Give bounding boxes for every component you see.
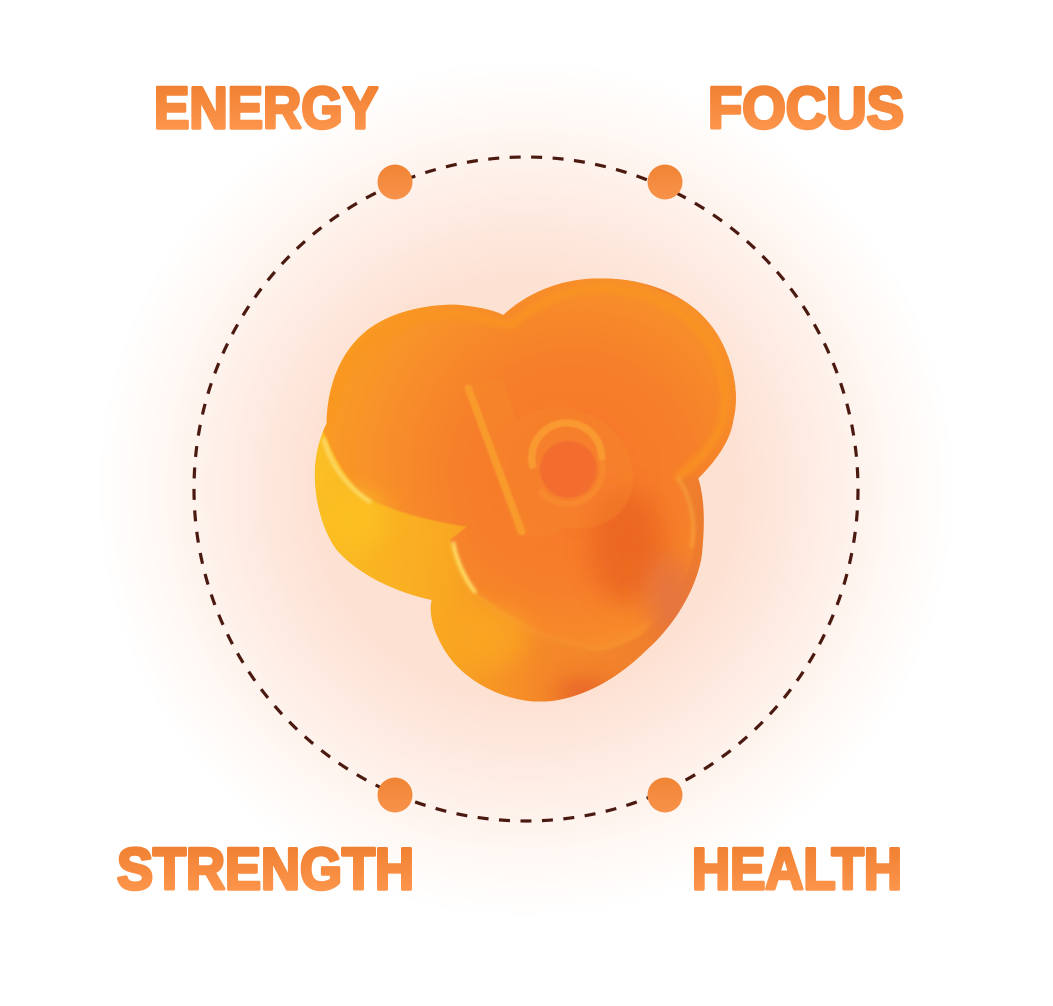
- label: health: HEALTH: [692, 837, 902, 902]
- node: strength: [378, 778, 412, 812]
- highlight edges: [324, 288, 725, 649]
- background glow: [96, 59, 956, 919]
- node: health: [648, 778, 682, 812]
- node: focus: [648, 164, 682, 200]
- node: energy: [378, 164, 412, 200]
- logo letter b: [463, 380, 633, 537]
- dashed orbit ring: [194, 157, 858, 821]
- gummy illustration: [314, 278, 736, 702]
- label: focus: FOCUS: [708, 76, 904, 141]
- label: strength: STRENGTH: [117, 837, 414, 902]
- label: energy: ENERGY: [154, 76, 378, 141]
